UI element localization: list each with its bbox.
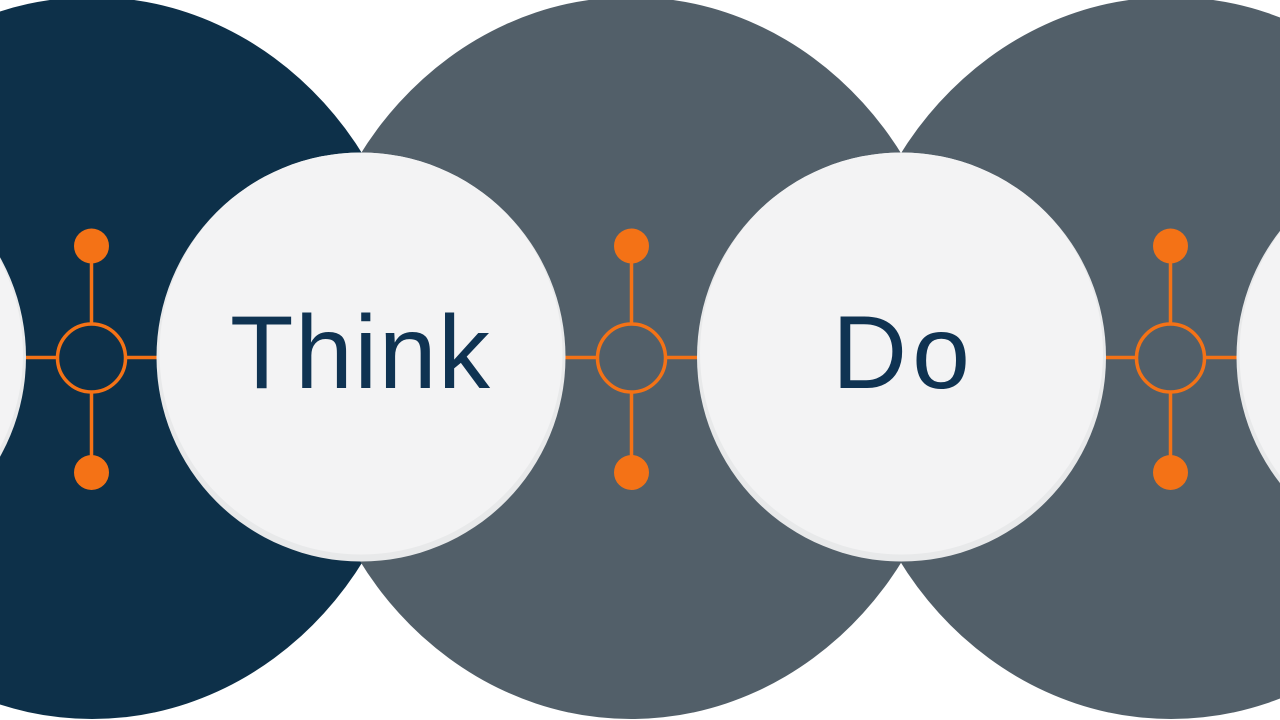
white disc: Think	[156, 152, 566, 562]
large circle: slate right	[843, 0, 1280, 719]
label: Do: Do	[832, 295, 970, 411]
white disc: Do	[697, 152, 1106, 562]
label: Think: Think	[230, 295, 491, 411]
connector icon: middle circle	[560, 228, 702, 490]
connector icon: navy circle	[20, 228, 162, 490]
partial white disc: right edge	[1236, 152, 1280, 562]
connector icon: right circle	[1100, 228, 1242, 490]
large circle: slate middle	[303, 0, 959, 719]
large circle: navy	[0, 0, 420, 719]
partial white disc: left edge	[0, 152, 26, 562]
